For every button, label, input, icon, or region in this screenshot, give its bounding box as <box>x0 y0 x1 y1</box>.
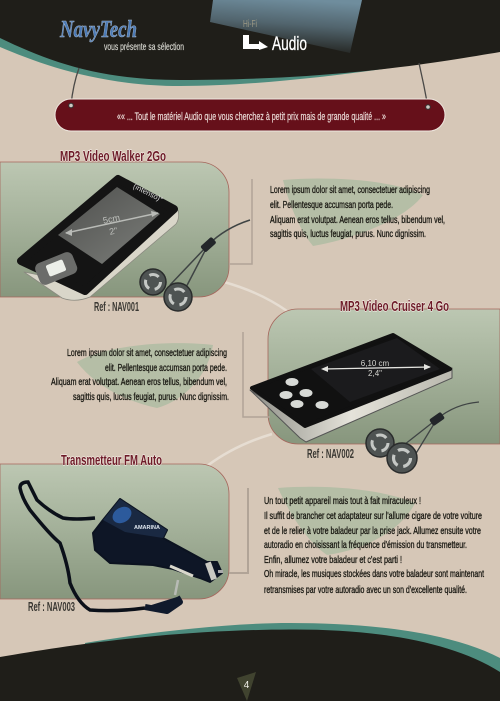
reference: NAV002: Ref : NAV002 <box>307 446 354 461</box>
brackets <box>229 179 270 573</box>
illustration: MP3 player 2: 6,10 cm <box>361 359 390 368</box>
section label Hi-Fi: Hi-Fi <box>243 19 257 30</box>
header band <box>0 0 500 86</box>
title: product 3: Transmetteur FM Auto <box>61 452 162 469</box>
page number: 4 <box>244 680 250 691</box>
connector swooshes <box>207 282 287 466</box>
illustration: MP3 player 1 <box>21 179 250 311</box>
header light band <box>210 0 362 53</box>
text block: product 1 <box>270 184 445 240</box>
panel: product 1 background <box>0 162 229 297</box>
text block: product 2: Aliquam erat volutpat. Aenean eros tellus, bibendum vel, <box>51 376 227 388</box>
text block: product 3 <box>264 495 484 596</box>
page number <box>237 672 256 701</box>
text block: product 2 <box>51 347 229 403</box>
illustration: FM transmitter: AMARINA <box>134 525 160 531</box>
panel: product 3 background <box>0 464 229 599</box>
title: product 1: MP3 Video Walker 2Go <box>60 148 166 165</box>
text block: product 2: sagittis quis, luctus feugiat, purus. Nunc dignissim. <box>73 391 229 403</box>
reference: NAV003: Ref : NAV003 <box>28 599 75 614</box>
illustration: MP3 player 1: 2" <box>108 225 118 237</box>
illustration: MP3 player 2: 2,4" <box>368 369 382 378</box>
illustration: MP3 player 2 <box>250 335 479 473</box>
illustration: MP3 player 1: (intenso)° <box>132 181 165 204</box>
text block: product 3: Un tout petit appareil mais tout à fait miraculeux ! <box>264 495 421 507</box>
text block: product 3: Enfin, allumez votre baladeur et c'est parti ! <box>264 554 402 566</box>
reference: NAV001: Ref : NAV001 <box>94 299 139 314</box>
logo NavyTech: NavyTech <box>59 17 137 43</box>
logo subtitle: vous présente sa sélection <box>104 41 184 53</box>
text block: product 2: Lorem ipsum dolor sit amet, consectetuer adipiscing <box>67 347 227 359</box>
text block: product 1: sagittis quis, luctus feugiat, purus. Nunc dignissim. <box>270 228 426 240</box>
section heading Audio: Audio <box>272 34 307 55</box>
text block: product 1: elit. Pellentesque accumsan porta pede. <box>270 199 393 211</box>
footer band <box>0 623 500 701</box>
text block: product 2: elit. Pellentesque accumsan porta pede. <box>105 362 227 374</box>
illustration: FM transmitter <box>20 482 223 611</box>
panel: product 2 background <box>268 309 500 444</box>
hanging strings <box>71 63 428 107</box>
icon: white arrow <box>243 35 268 50</box>
banner <box>55 99 445 131</box>
green blobs behind text <box>77 179 423 555</box>
illustration: MP3 player 1: 5cm <box>102 212 121 226</box>
